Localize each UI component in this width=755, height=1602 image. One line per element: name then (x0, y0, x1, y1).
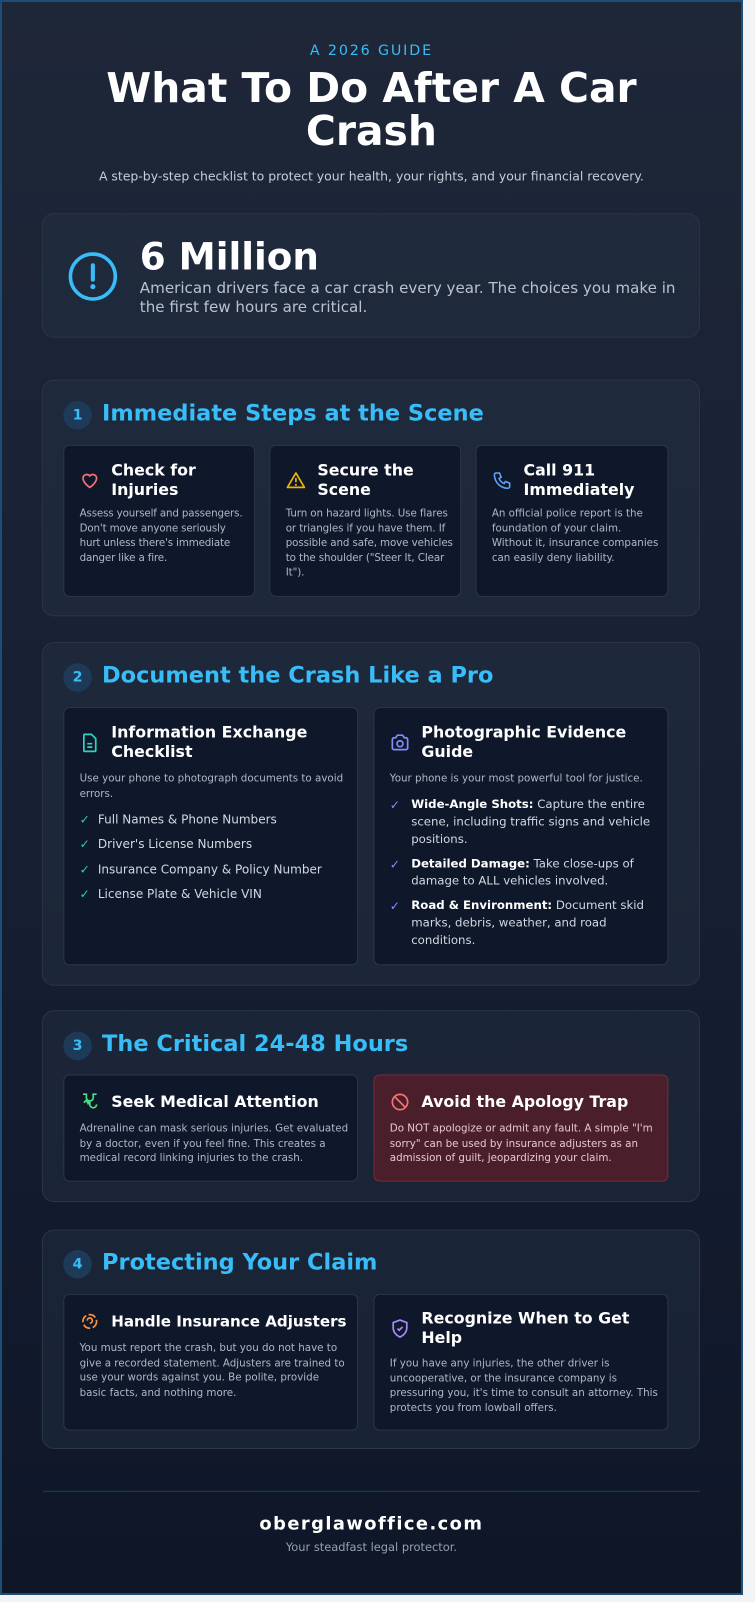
panel: section 4: 4 (73, 1256, 83, 1272)
card: info exchange: Checklist (111, 743, 193, 761)
card: secure scene: Turn on hazard lights. Use flares or triangles if you have them. If possible and safe, move vehicles to the shoulder ("Steer It, Clear It"). (286, 508, 453, 579)
card: photo guide: ✓ (390, 899, 400, 913)
card: call 911: Call 911 (523, 461, 595, 480)
stat text: American drivers face a car crash every year. The choices you make in the first few hours are critical. (140, 280, 675, 316)
card: secure scene: Secure the (317, 461, 414, 480)
heading 2: Document the Crash Like a Pro (102, 663, 493, 689)
card: get help: Recognize When to Get (421, 1309, 629, 1328)
heading 4: Protecting Your Claim (102, 1250, 377, 1276)
card: check injuries: Don't move anyone seriously (80, 523, 226, 534)
panel: section 3 (42, 1010, 700, 1202)
card: secure scene: Scene (317, 481, 371, 499)
card: apology trap: Do NOT apologize or admit any fault. A simple "I'm sorry" can be used by insurance adjusters as an admission of guilt, jeopardizing your claim. (390, 1123, 653, 1164)
card: photo guide: Wide-Angle Shots: Capture the entire scene, including traffic signs and vehicle positions. (411, 797, 650, 846)
card: call 911 (476, 445, 668, 597)
panel: section 1: 1 (73, 407, 83, 423)
icon: alert (68, 252, 118, 301)
card: adjusters: Handle Insurance Adjusters (111, 1313, 347, 1331)
card: photo guide: Guide (421, 743, 473, 761)
card: info exchange: ✓ Driver's License Numbers (80, 837, 252, 851)
card: get help: If you have any injuries, the other driver is uncooperative, or the insurance company is pressuring you, it's time to consult an attorney. This protects you from lowball offers. (390, 1358, 658, 1414)
card: photo guide: Your phone is your most powerful tool for justice. (390, 773, 643, 785)
card: info exchange: ✓ License Plate & Vehicle VIN (80, 887, 262, 901)
card: apology trap (373, 1074, 668, 1182)
card: check injuries: hurt unless there's immediate (80, 538, 230, 549)
footer tagline: Your steadfast legal protector. (286, 1541, 457, 1554)
card: adjusters: You must report the crash, but you do not have to give a recorded statement. Adjusters are trained to use your words against you. Be polite, provide basic facts, and nothing more. (80, 1343, 345, 1399)
card: check injuries: Assess yourself and passengers. (80, 508, 242, 519)
panel: section 2 (42, 642, 700, 986)
heading 1: Immediate Steps at the Scene (102, 401, 484, 427)
title: What To Do After A Car Crash (106, 65, 637, 155)
card: photo guide: ✓ (390, 857, 400, 871)
card: photo guide: Detailed Damage: Take close-ups of damage to ALL vehicles involved. (411, 856, 634, 888)
stat number: 6 Million (140, 235, 319, 279)
card: call 911: An official police report is the foundation of your claim. Without it, insurance companies can easily deny liability. (492, 508, 658, 564)
card: check injuries: Injuries (111, 481, 178, 499)
card: info exchange: Use your phone to photograph documents to avoid errors. (80, 773, 343, 800)
panel: section 2: 2 (73, 669, 83, 686)
card: medical (63, 1074, 358, 1182)
card: photo guide: ✓ (390, 798, 400, 812)
card: photo guide (373, 707, 668, 965)
stat panel (42, 213, 700, 338)
footer site: oberglawoffice.com (259, 1514, 483, 1535)
card: medical: Seek Medical Attention (111, 1093, 319, 1111)
card: info exchange: ✓ Insurance Company & Policy Number (80, 862, 322, 877)
card: check injuries: Check for (111, 461, 196, 480)
eyebrow: A 2026 GUIDE (310, 43, 433, 59)
subtitle: A step-by-step checklist to protect your health, your rights, and your financial recovery. (99, 169, 644, 184)
card: photo guide: Road & Environment: Document skid marks, debris, weather, and road conditions. (411, 898, 644, 947)
panel: section 3: 3 (73, 1038, 83, 1054)
card: info exchange: ✓ Full Names & Phone Numbers (80, 812, 277, 827)
card: adjusters (63, 1294, 358, 1431)
card: apology trap: Avoid the Apology Trap (421, 1093, 628, 1111)
card: get help: Help (421, 1329, 462, 1347)
card: secure scene (269, 445, 461, 597)
heading 3: The Critical 24-48 Hours (102, 1032, 408, 1057)
card: medical: Adrenaline can mask serious injuries. Get evaluated by a doctor, even if you feel fine. This creates a medical record linking injuries to the crash. (80, 1123, 348, 1164)
panel: section 4 (42, 1230, 700, 1449)
card: info exchange (63, 707, 358, 965)
card: check injuries (63, 445, 255, 597)
panel: section 1 (42, 380, 700, 616)
card: call 911: Immediately (523, 481, 634, 499)
card: get help (373, 1294, 668, 1431)
card: info exchange: Information Exchange (111, 723, 307, 742)
card: photo guide: Photographic Evidence (421, 723, 626, 742)
card: check injuries: danger like a fire. (80, 553, 167, 564)
